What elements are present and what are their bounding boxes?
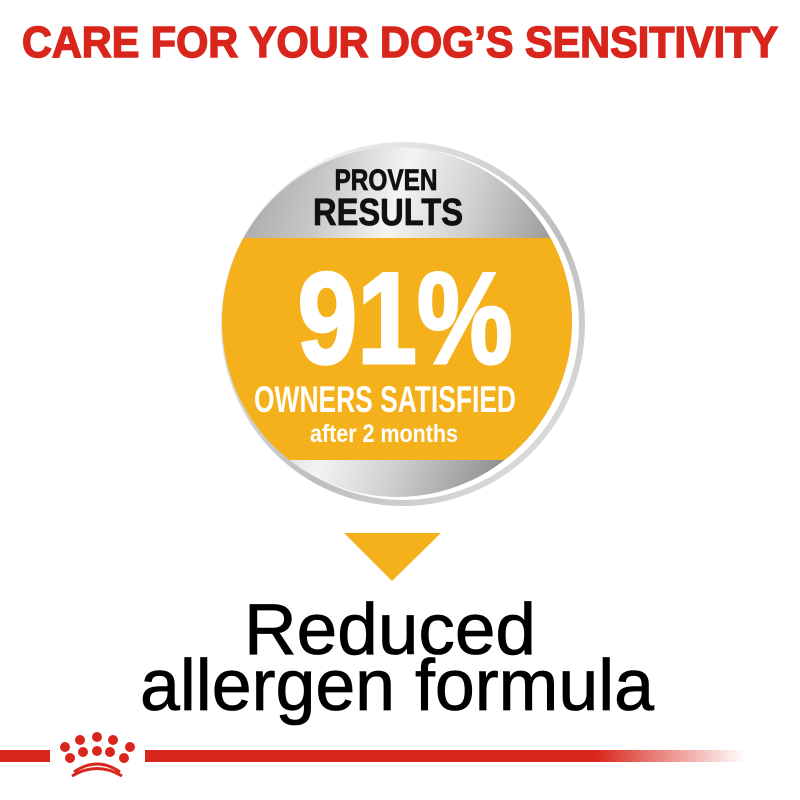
heading: reduced allergen formula: Reduced bbox=[244, 590, 536, 670]
yellow band bbox=[222, 238, 572, 460]
stat sublabel: after 2 months bbox=[310, 420, 458, 448]
badge heading: RESULTS bbox=[313, 192, 463, 234]
arrow: yellow triangle bbox=[344, 533, 441, 581]
stat label: OWNERS SATISFIED bbox=[254, 379, 516, 420]
badge: proven results bbox=[200, 145, 600, 503]
badge heading bbox=[313, 164, 463, 234]
outer ring bbox=[224, 145, 582, 503]
heading: reduced allergen formula bbox=[140, 590, 655, 726]
icon: crown logo bbox=[60, 732, 135, 776]
footer line bbox=[0, 750, 745, 762]
heading: reduced allergen formula: allergen formula bbox=[140, 646, 655, 726]
stat: 91%: 91% bbox=[298, 245, 512, 391]
badge heading: PROVEN bbox=[334, 164, 438, 197]
silver disc bbox=[222, 147, 572, 497]
